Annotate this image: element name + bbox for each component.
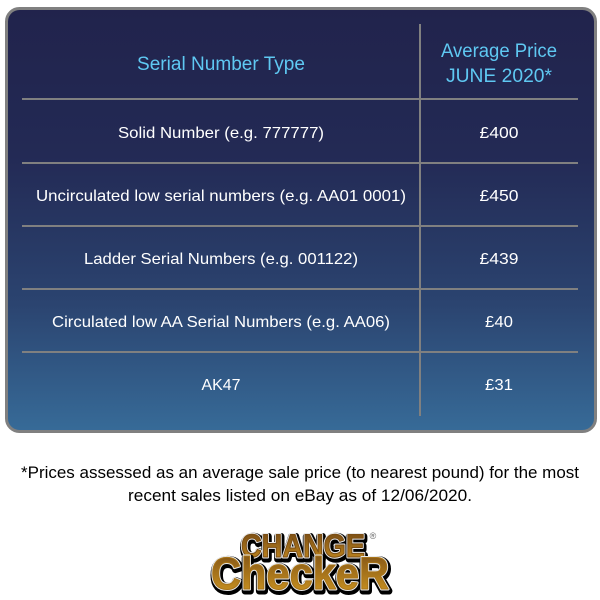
logo: Change Checker: CHANGE (241, 528, 365, 564)
footnote (21, 464, 579, 505)
row: ladder serial numbers: £439 (480, 251, 519, 268)
table panel (6, 8, 596, 432)
row: solid number: Solid Number (e.g. 777777) (118, 125, 324, 142)
row: uncirculated low serial numbers: £450 (480, 188, 519, 205)
row: AK47: AK47 (202, 377, 241, 394)
row: circulated low AA serial numbers: £40 (485, 314, 513, 331)
header: average price: Average Price (441, 41, 557, 62)
row: AK47: £31 (485, 377, 513, 394)
row: ladder serial numbers: Ladder Serial Numbers (e.g. 001122) (84, 251, 358, 268)
row: uncirculated low serial numbers: Uncirculated low serial numbers (e.g. AA01 0001) (36, 188, 406, 205)
logo: Change Checker: CheckeR (211, 548, 389, 599)
logo: Change Checker: CheckeR (212, 550, 390, 600)
row: solid number (118, 125, 519, 142)
header: serial number type: Serial Number Type (137, 54, 305, 75)
logo: Change Checker (211, 528, 390, 600)
footnote: recent sales listed on eBay as of 12/06/2020. (128, 487, 472, 505)
logo: Change Checker: CHANGE (241, 528, 365, 564)
logo: Change Checker: CHANGE (242, 530, 366, 566)
logo: Change Checker: ® (370, 531, 377, 541)
header: average price: JUNE 2020* (446, 66, 553, 87)
header: average price (441, 41, 557, 87)
row: AK47 (202, 377, 513, 394)
footnote: *Prices assessed as an average sale price (to nearest pound) for the most (21, 464, 579, 482)
row: solid number: £400 (480, 125, 519, 142)
row: ladder serial numbers (84, 251, 519, 268)
row: circulated low AA serial numbers: Circulated low AA Serial Numbers (e.g. AA06) (52, 314, 390, 331)
logo: Change Checker: CheckeR (211, 548, 389, 599)
